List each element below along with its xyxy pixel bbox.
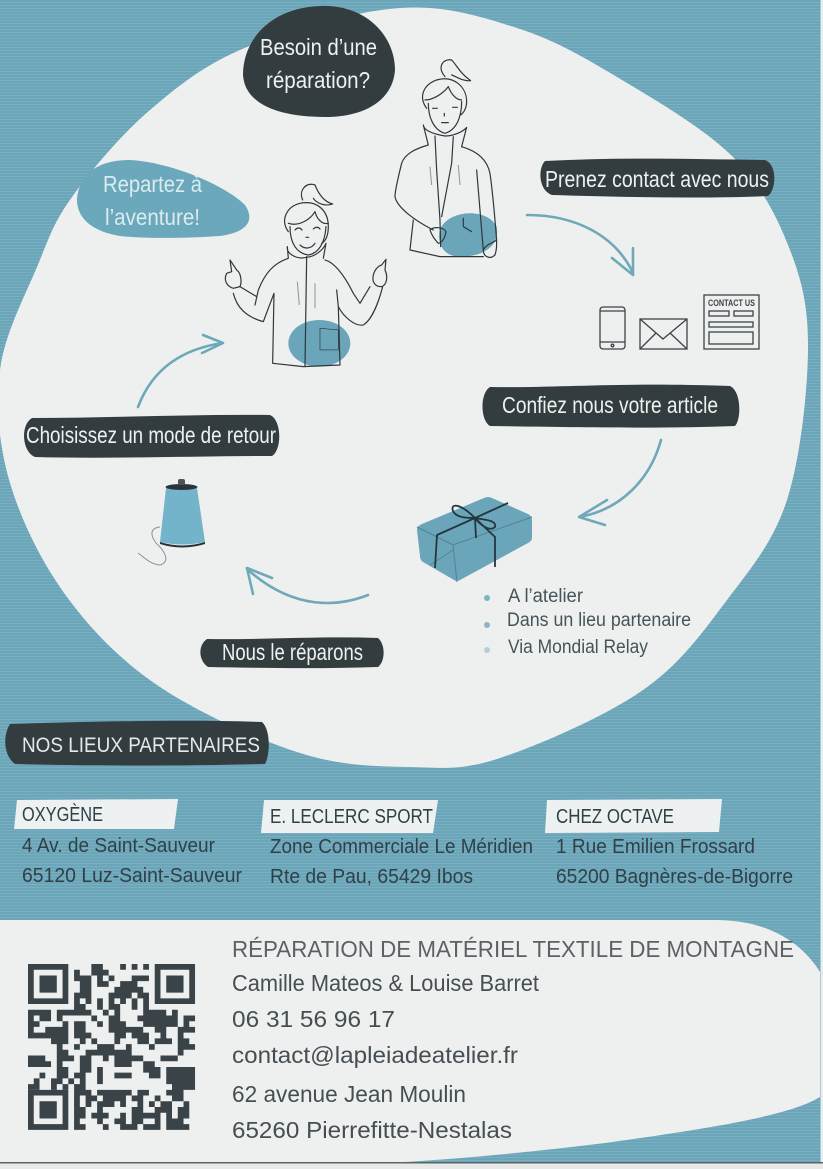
step bubble: Repartez à l'aventure! [77,160,249,238]
step bubble: Repartez à l'aventure!: l’aventure! [105,204,200,230]
white central blob [0,7,808,768]
heading: Nos lieux partenaires: NOS LIEUX PARTENAIRES [22,734,260,757]
partner: Oxygène: 65120 Luz-Saint-Sauveur [22,865,242,887]
illustration: happy person with repaired jacket [225,184,387,367]
icon: smartphone [600,307,625,349]
return options list: Via Mondial Relay [508,637,648,658]
step bubble: Besoin d'une réparation? [243,6,395,117]
step label: Nous le réparons: Nous le réparons [222,639,363,665]
heading: Nos lieux partenaires [5,721,269,766]
contact panel [0,920,823,1169]
step bubble: Besoin d'une réparation?: réparation? [266,67,370,93]
partner: Chez Octave: CHEZ OCTAVE [556,806,674,828]
step label: Choisissez un mode de retour [24,415,279,458]
return options list: A l’atelier [508,586,584,607]
illustration: worried person with torn jacket [395,60,497,257]
step label: Prenez contact avec nous [540,159,774,198]
contact details [232,970,540,1143]
partner: E. Leclerc Sport [261,800,533,888]
partner: E. Leclerc Sport: Rte de Pau, 65429 Ibos [270,866,473,888]
contact details: 62 avenue Jean Moulin [232,1081,466,1107]
icon: envelope [640,319,687,349]
return options list [484,586,691,658]
contact details: 06 31 56 96 17 [232,1006,395,1032]
partner: Chez Octave: 65200 Bagnères-de-Bigorre [556,866,793,888]
icon: contact form: CONTACT US [708,298,755,308]
arrow: to parcel [579,440,661,525]
partner: E. Leclerc Sport: Zone Commerciale Le Méridien [270,836,533,858]
arrow: back to happy person [138,335,223,407]
step bubble: Repartez à l'aventure!: Repartez à [103,171,202,197]
return options list: Dans un lieu partenaire [507,610,691,631]
partner: Oxygène: 4 Av. de Saint-Sauveur [22,835,215,857]
QR code [28,964,195,1130]
step label: Choisissez un mode de retour: Choisissez un mode de retour [26,422,276,448]
illustration: wrapped parcel [417,497,532,582]
step label: Confiez nous votre article [482,385,739,428]
contact details: 65260 Pierrefitte-Nestalas [232,1117,512,1143]
partner: Chez Octave [545,799,793,888]
contact details: Camille Mateos & Louise Barret [232,970,540,996]
step label: Prenez contact avec nous: Prenez contact avec nous [545,166,769,192]
icon: contact form [704,295,759,349]
partner: Chez Octave: 1 Rue Emilien Frossard [556,836,755,858]
partner: E. Leclerc Sport: E. LECLERC SPORT [270,806,433,828]
arrow: to thread spool [247,568,368,603]
step bubble: Besoin d'une réparation?: Besoin d’une [260,34,377,60]
partner: Oxygène: OXYGÈNE [22,803,103,826]
partner: Oxygène [14,799,242,887]
step label: Confiez nous votre article: Confiez nous votre article [502,392,718,418]
illustration: thread spool [138,479,205,565]
contact details: contact@lapleiadeatelier.fr [232,1042,518,1068]
arrow: to contact icons [527,215,633,275]
contact heading: RÉPARATION DE MATÉRIEL TEXTILE DE MONTAGNE [232,936,794,962]
